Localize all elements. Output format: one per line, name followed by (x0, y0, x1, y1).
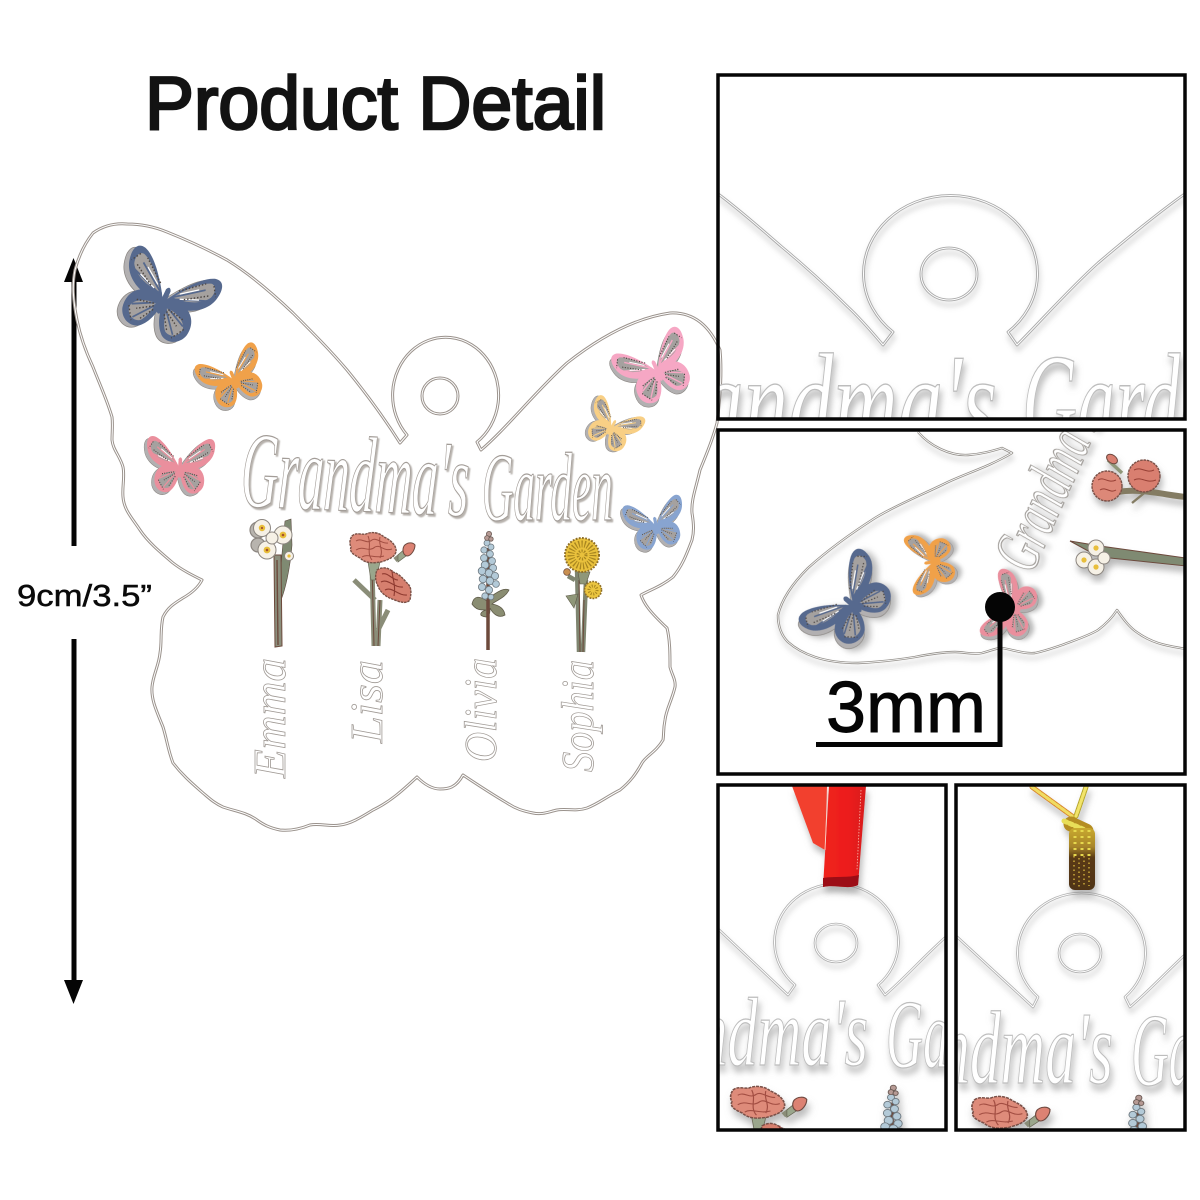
butterfly: pale yellow (575, 393, 647, 460)
butterfly: orange (190, 341, 275, 417)
flower: carnation crop (970, 1096, 1056, 1128)
thickness label: 3mm (826, 668, 986, 748)
ornament outline in perspective (778, 432, 1186, 663)
panel: gold cord option (954, 783, 1187, 1132)
name: Lisa: Lisa (341, 660, 392, 744)
name: Olivia: Olivia (455, 658, 506, 762)
butterfly: light blue (619, 494, 691, 556)
butterfly: light pink (606, 325, 705, 416)
flower: carnation (350, 533, 415, 646)
flower: carnation stems (1092, 452, 1186, 503)
hanging hole (422, 378, 458, 414)
butterfly ornament: Garden (482, 434, 613, 542)
panel: hole close-up (716, 73, 1187, 421)
thickness callout (816, 592, 1015, 748)
ornament outline (73, 224, 721, 830)
butterfly ornament (73, 224, 721, 830)
angled heading: Grandma's (979, 396, 1115, 581)
flower: daffodil (250, 519, 294, 647)
panel: ribbon option (716, 783, 948, 1132)
flower: delphinium (472, 531, 509, 650)
arrow: down (64, 639, 83, 1004)
butterfly: large navy (100, 242, 225, 356)
flower: marigold (564, 538, 602, 652)
heading fragment: Garden (886, 981, 1041, 1089)
dimension label: 9cm/3.5” (17, 578, 152, 613)
name: Sophia: Sophia (552, 660, 603, 772)
flower: carnation crop (728, 1086, 813, 1128)
hanger shape outline (955, 893, 1188, 1007)
icon: gold cord (1032, 787, 1095, 890)
name: Emma: Emma (244, 658, 295, 779)
title: Product Detail (145, 61, 606, 145)
size annotation: height arrow (17, 258, 152, 1004)
marker dot and leader (816, 592, 1015, 747)
panel: thickness close-up (718, 396, 1186, 774)
hanger shape outline (715, 884, 948, 995)
hanger shape outline (717, 193, 1186, 345)
heading on ornament: Grandma's (239, 411, 472, 540)
heading fragment (720, 996, 944, 1078)
butterfly: navy (798, 548, 900, 655)
arrow: up (64, 258, 83, 546)
heading fragment (720, 352, 1184, 418)
heading fragment (958, 1010, 1184, 1096)
butterfly: rose (142, 436, 216, 497)
flower: delphinium crop (1127, 1094, 1152, 1128)
flower: daffodil stem (1070, 540, 1186, 575)
butterfly: orange (903, 528, 961, 598)
icon: red ribbon (792, 786, 866, 887)
heading fragment: Grandma's (600, 979, 868, 1087)
flower: delphinium crop (880, 1084, 908, 1128)
butterfly: rose (980, 566, 1046, 642)
